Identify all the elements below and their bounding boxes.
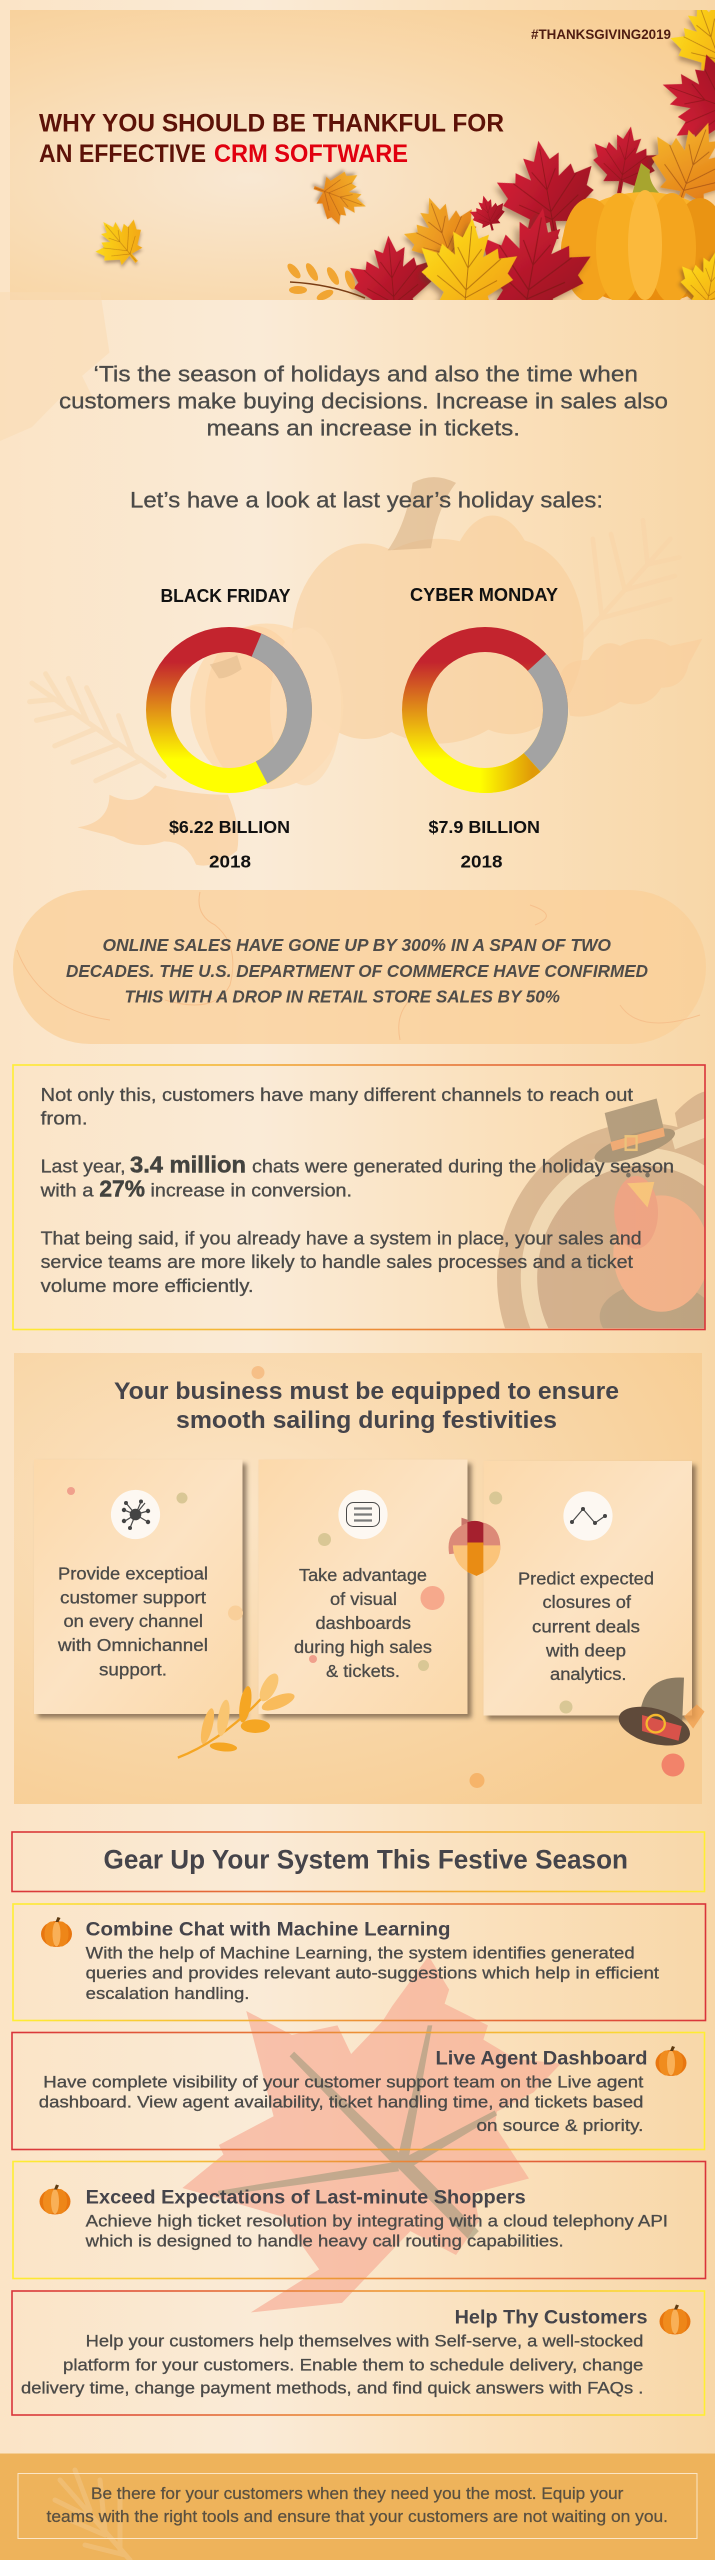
title: WHY YOU SHOULD BE THANKFUL FOR [39, 110, 504, 138]
feature: exceed expectations: Exceed Expectations of Last-minute Shoppers [86, 2187, 526, 2208]
callout: online sales: THIS WITH A DROP IN RETAIL STORE SALES BY 50% [124, 986, 560, 1006]
background illustration: ghost pumpkins and foliage [0, 292, 702, 866]
ghost feather right [579, 520, 679, 641]
chart: Cyber Monday donut: 2018 [460, 852, 503, 872]
feature: help thy customers [12, 2291, 704, 2415]
chart: Cyber Monday donut [410, 585, 558, 872]
feature: help thy customers: delivery time, change payment methods, and find quick answers with FAQs . [21, 2379, 643, 2398]
card text: closures of [542, 1592, 631, 1612]
card text: on every channel [64, 1611, 203, 1631]
body text: Last year, [41, 1156, 126, 1177]
icon: golden branch [178, 1670, 296, 1758]
footer band [0, 2454, 715, 2560]
card text: during high sales [294, 1637, 432, 1657]
chart: Cyber Monday donut: $7.9 BILLION [428, 817, 540, 837]
intro text: customers make buying decisions. Increase in sales also [59, 388, 668, 414]
sub heading: Let’s have a look at last year’s holiday sales: [130, 488, 603, 512]
card text: Take advantage [299, 1565, 427, 1585]
heading: smooth sailing during festivities [176, 1407, 557, 1434]
icon: pilgrim hat [615, 1678, 705, 1752]
callout: online sales [13, 890, 706, 1044]
gradient border [13, 1065, 705, 1330]
ghost maple corner [0, 292, 109, 441]
illustration: pumpkin and autumn leaves [287, 10, 715, 300]
footer text [46, 2485, 668, 2526]
panel: business must be equipped [14, 1353, 705, 1804]
ghost oak left [78, 786, 238, 866]
card text: support. [99, 1659, 167, 1679]
title: AN EFFECTIVE [39, 140, 206, 168]
icon: dashboard list [338, 1490, 388, 1539]
icon: pumpkin [41, 1917, 72, 1947]
intro text: means an increase in tickets. [206, 416, 520, 440]
body text [40, 1084, 674, 1296]
feature: live agent dashboard: dashboard. View agent availability, ticket handling time, and tickets based [39, 2093, 643, 2112]
card text [57, 1563, 208, 1679]
card text [518, 1569, 654, 1684]
body text: 3.4 million [130, 1152, 246, 1178]
ghost large pumpkin [292, 516, 584, 744]
hashtag: #THANKSGIVING2019 [531, 27, 671, 42]
footer border [18, 2474, 697, 2538]
icon: pumpkin [656, 2046, 686, 2076]
chart: Cyber Monday donut: CYBER MONDAY [410, 585, 558, 605]
feature: combine chat with machine learning: With the help of Machine Learning, the system identifies generated [86, 1943, 635, 1962]
pumpkin [561, 163, 715, 304]
heading [114, 1378, 619, 1434]
decorative dots [470, 1754, 684, 1788]
section title: Gear Up: Gear Up Your System This Festive Season [104, 1844, 628, 1874]
icon: acorn [449, 1518, 500, 1576]
card: omnichannel [34, 1460, 243, 1714]
card text: customer support [60, 1588, 206, 1608]
feature: live agent dashboard: Have complete visibility of your customer support team on the Live agent [43, 2072, 644, 2092]
body text: increase in conversion. [150, 1179, 352, 1200]
ghost feather left [30, 674, 164, 781]
feature: help thy customers: Help your customers help themselves with Self-serve, a well-stocked [86, 2331, 643, 2350]
intro text: ‘Tis the season of holidays and also the time when [94, 362, 638, 386]
body text: from. [41, 1108, 88, 1129]
panel background [14, 1353, 702, 1804]
icon: network hub [111, 1490, 160, 1539]
hero background [10, 10, 715, 300]
ghost oak right [561, 639, 702, 717]
heading: Your business must be equipped to ensure [114, 1378, 619, 1405]
falling leaf small [84, 206, 156, 278]
chart: Black Friday donut: $6.22 BILLION [169, 817, 290, 837]
section title: Gear Up [12, 1832, 704, 1892]
feature: live agent dashboard [12, 2032, 704, 2150]
ghost small pumpkin [190, 624, 343, 789]
callout: online sales: DECADES. THE U.S. DEPARTMENT OF COMMERCE HAVE CONFIRMED [66, 961, 648, 981]
icon: pumpkin [660, 2304, 690, 2334]
footer text: teams with the right tools and ensure that your customers are not waiting on you. [46, 2508, 668, 2526]
chart: Black Friday donut: BLACK FRIDAY [160, 586, 290, 606]
feature: exceed expectations [13, 2162, 706, 2278]
branch of small leaves [287, 263, 366, 300]
footer leaf decoration [55, 2470, 130, 2560]
icon: line chart [563, 1491, 613, 1541]
turkey illustration [497, 1092, 704, 1328]
card: dashboards [258, 1460, 468, 1714]
feature: exceed expectations: Achieve high ticket resolution by integrating with a cloud telephony API [86, 2211, 668, 2230]
title [39, 110, 504, 168]
title: CRM SOFTWARE [214, 140, 408, 168]
body text: service teams are more likely to handle sales processes and a ticket [41, 1251, 633, 1272]
feature: combine chat with machine learning: queries and provides relevant auto-suggestions which help in efficient [86, 1963, 659, 1982]
body text: 27% [99, 1175, 145, 1201]
feature: live agent dashboard: on source & priority. [476, 2116, 643, 2135]
feature: help thy customers: Help Thy Customers [455, 2307, 648, 2328]
feature: combine chat with machine learning: Combine Chat with Machine Learning [86, 1919, 450, 1940]
callout: online sales: ONLINE SALES HAVE GONE UP BY 300% IN A SPAN OF TWO [102, 935, 611, 955]
footer [0, 2454, 715, 2560]
feature: exceed expectations: which is designed to handle heavy call routing capabilities. [85, 2231, 564, 2250]
chart: Black Friday donut [158, 586, 300, 872]
card text: dashboards [316, 1613, 411, 1633]
chart: Black Friday donut: 2018 [209, 852, 251, 872]
card text: current deals [532, 1617, 640, 1637]
card text: of visual [330, 1589, 397, 1609]
card text: with deep [545, 1640, 626, 1660]
icon: pumpkin [40, 2184, 70, 2214]
card text: analytics. [550, 1664, 626, 1684]
card text: & tickets. [326, 1661, 400, 1681]
feature: live agent dashboard: Live Agent Dashboard [436, 2048, 648, 2070]
body text: chats were generated during the holiday season [252, 1156, 674, 1177]
falling leaf [305, 163, 375, 231]
card text: Predict expected [518, 1569, 654, 1589]
card text: Provide exceptioal [58, 1563, 208, 1583]
card text [294, 1565, 432, 1681]
feature: combine chat with machine learning [13, 1904, 706, 2020]
intro text [59, 362, 668, 440]
feature: help thy customers: platform for your customers. Enable them to schedule delivery, change [63, 2355, 643, 2374]
body text: Not only this, customers have many different channels to reach out [41, 1084, 633, 1105]
card: analytics [484, 1461, 692, 1716]
watermark: maple leaf [182, 1956, 561, 2312]
body text: That being said, if you already have a system in place, your sales and [41, 1227, 642, 1248]
card text: with Omnichannel [57, 1635, 208, 1655]
panel: channels and chats [12, 1064, 706, 1330]
dot behind heading [252, 1366, 264, 1379]
hero banner [10, 10, 715, 300]
ghost stem [388, 477, 456, 550]
feature: combine chat with machine learning: escalation handling. [86, 1984, 249, 2003]
body text: volume more efficiently. [41, 1275, 254, 1296]
footer text: Be there for your customers when they need you the most. Equip your [91, 2485, 624, 2503]
body text: with a [40, 1179, 94, 1200]
